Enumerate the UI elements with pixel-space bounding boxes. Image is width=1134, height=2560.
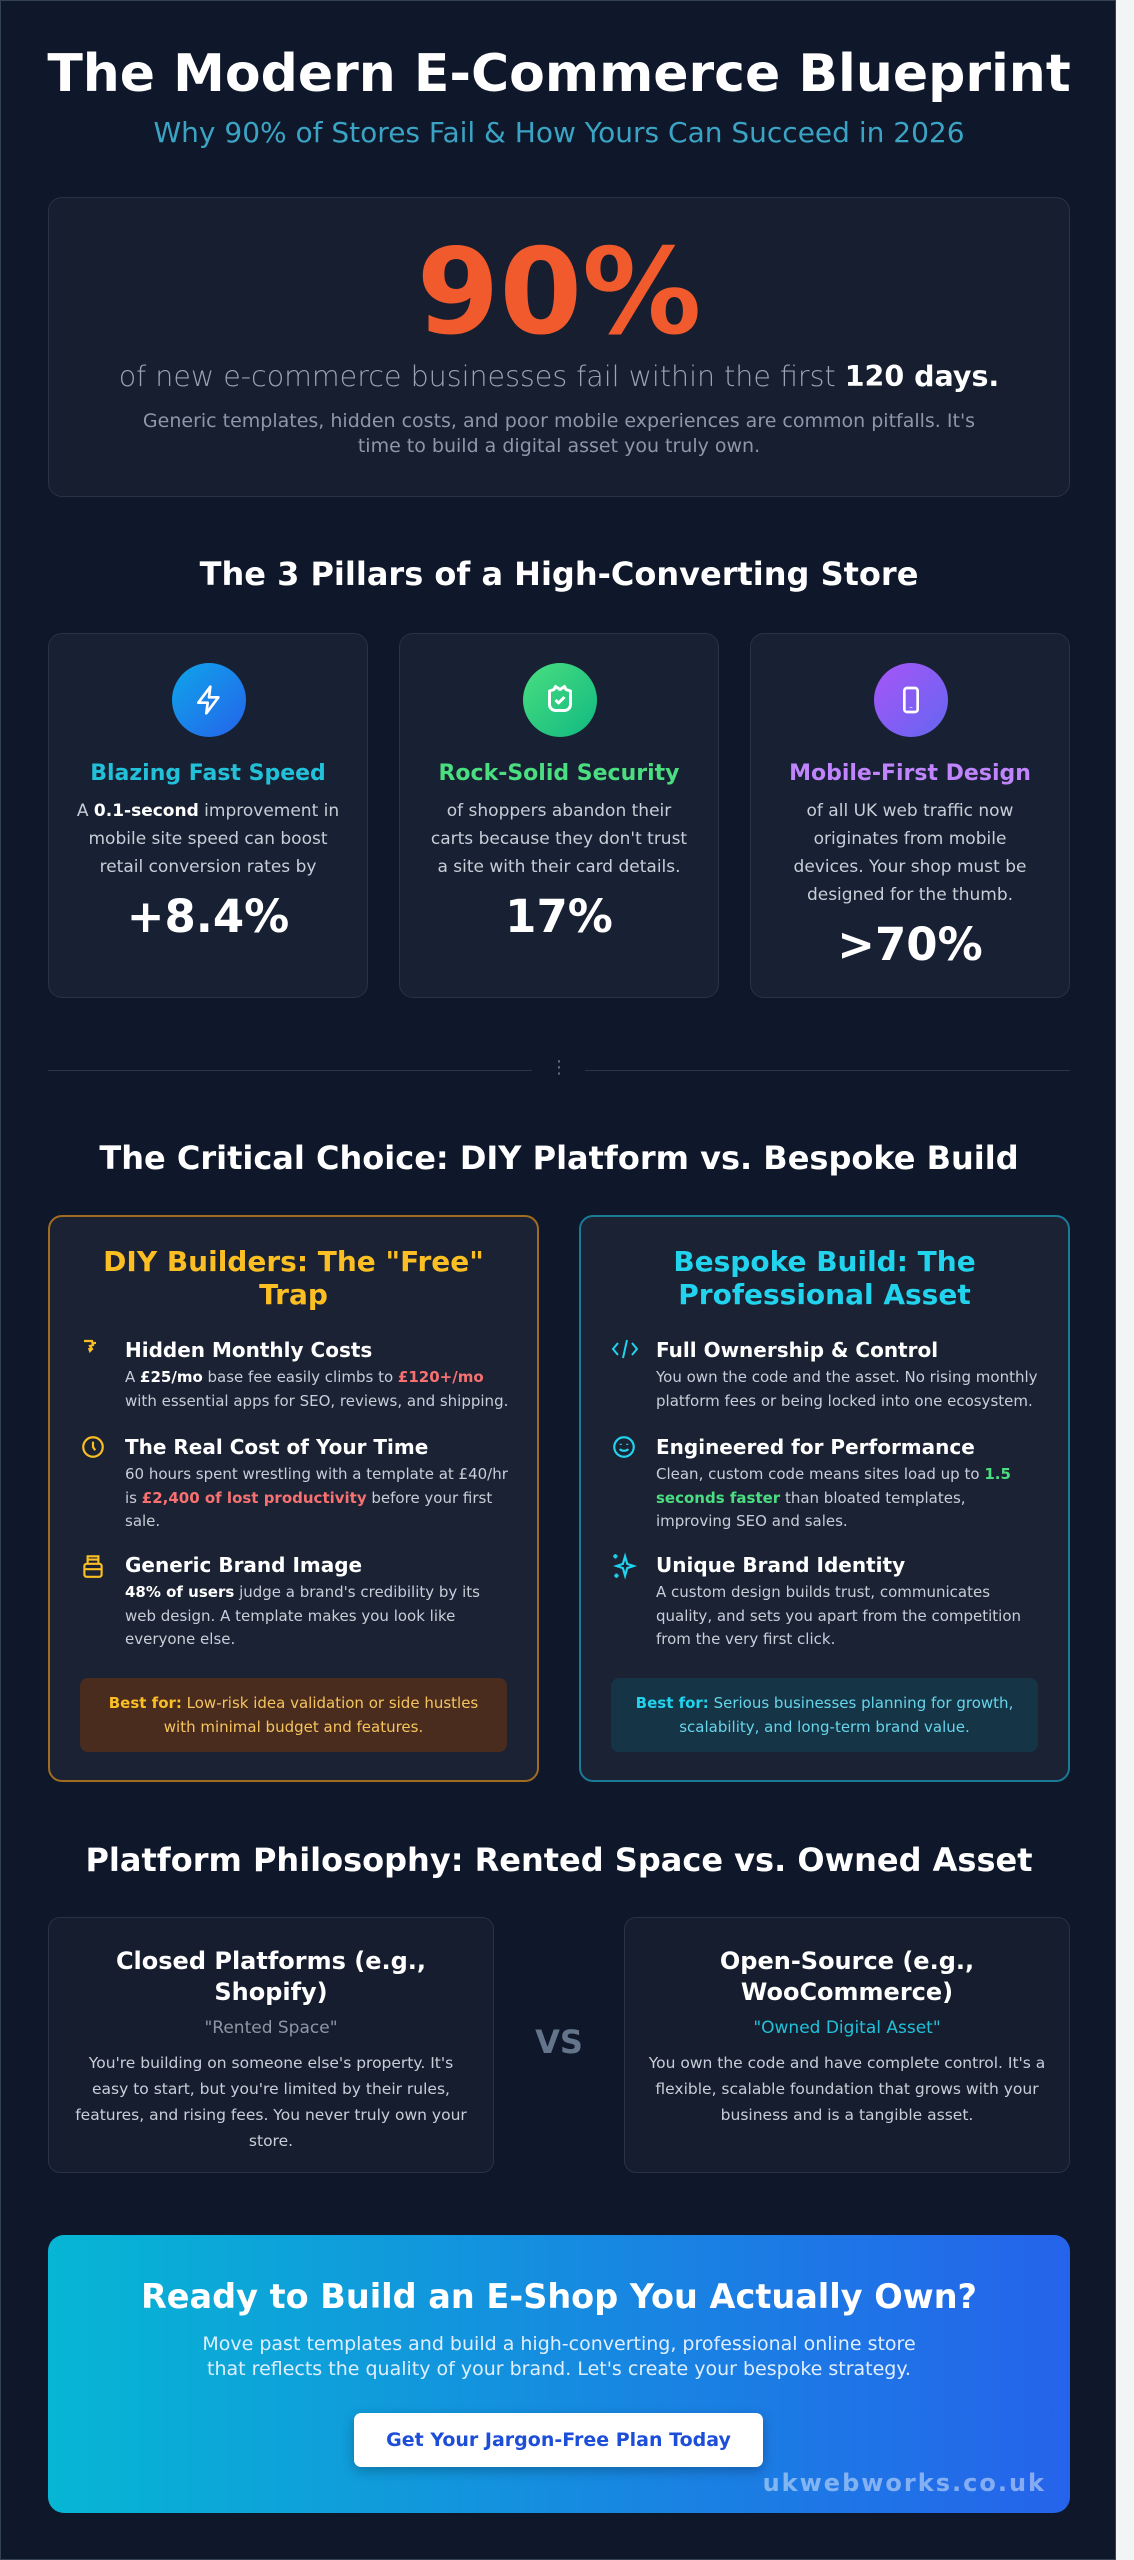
item: generic brand: Generic Brand Image — [125, 1553, 362, 1577]
item: ownership: You own the code and the asset. No rising monthly platform fees or being locked into one ecosystem. — [656, 1368, 1038, 1410]
title: The Modern E-Commerce Blueprint — [47, 44, 1071, 104]
item: ownership: Full Ownership & Control — [656, 1338, 938, 1362]
heading: platform philosophy: Platform Philosophy: Rented Space vs. Owned Asset — [85, 1841, 1033, 1879]
item: performance — [613, 1435, 1011, 1530]
panel: closed platforms: "Rented Space" — [204, 2018, 338, 2038]
card title: Bespoke Build: The Professional Asset — [673, 1245, 976, 1311]
item: ownership — [612, 1338, 1038, 1410]
panel: security — [399, 633, 719, 998]
button — [354, 2413, 763, 2467]
button: Get Your Jargon-Free Plan Today — [386, 2429, 731, 2451]
CTA text: Move past templates and build a high-converting, professional online store that reflects the quality of your brand. Let's create your bespoke strategy. — [202, 2333, 916, 2380]
heading: critical choice: The Critical Choice: DIY Platform vs. Bespoke Build — [99, 1139, 1019, 1177]
stat: +8.4% — [127, 890, 289, 943]
stat: >70% — [837, 918, 983, 971]
item: performance: Clean, custom code means sites load up to 1.5 seconds faster than bloated templates, improving SEO and sales. — [656, 1465, 1011, 1530]
item: hidden costs — [84, 1338, 508, 1410]
panel: open source — [624, 1917, 1070, 2173]
panel: closed platforms: Closed Platforms (e.g., Shopify) — [116, 1947, 426, 2006]
pillar text: of shoppers abandon their carts because they don't trust a site with their card details. — [431, 801, 687, 877]
item: time cost — [82, 1435, 508, 1530]
item: brand identity: Unique Brand Identity — [656, 1553, 905, 1577]
pillar title: Mobile-First Design — [789, 761, 1031, 786]
item: generic brand — [83, 1553, 480, 1648]
panel: closed platforms: You're building on someone else's property. It's easy to start, but you're limited by their rules, features, and rising fees. You never truly own your store. — [75, 2054, 467, 2150]
icon: shield — [523, 663, 597, 737]
item: brand identity: A custom design builds trust, communicates quality, and sets you apart from the competition from the very first click. — [656, 1583, 1021, 1648]
panel: hero stat — [48, 197, 1070, 497]
panel: bespoke build — [579, 1215, 1070, 1782]
big stat: 90% — [417, 224, 701, 362]
best for box: Best for: Low-risk idea validation or side hustles with minimal budget and features. — [109, 1694, 478, 1736]
item: brand identity — [613, 1552, 1021, 1648]
CTA heading: Ready to Build an E-Shop You Actually Own? — [141, 2277, 977, 2316]
pillar text: A 0.1-second improvement in mobile site speed can boost retail conversion rates by — [77, 801, 339, 877]
best for box — [611, 1678, 1038, 1752]
panel: open source: "Owned Digital Asset" — [753, 2018, 941, 2038]
panel: speed — [48, 633, 368, 998]
panel: mobile — [750, 633, 1070, 998]
panel: CTA — [48, 2235, 1070, 2513]
item: performance: Engineered for Performance — [656, 1435, 975, 1459]
pillar text: of all UK web traffic now originates from mobile devices. Your shop must be designed for the thumb. — [794, 801, 1026, 905]
panel: open source: Open-Source (e.g., WooCommerce) — [720, 1947, 974, 2006]
item: hidden costs: A £25/mo base fee easily climbs to £120+/mo with essential apps for SEO, reviews, and shipping. — [125, 1368, 508, 1410]
brand url: ukwebworks.co.uk — [763, 2469, 1046, 2497]
panel: closed platforms — [48, 1917, 494, 2173]
best for box — [80, 1678, 507, 1752]
stat caption: of new e-commerce businesses fail within the first 120 days. — [119, 360, 999, 393]
panel: DIY builders — [48, 1215, 539, 1782]
best for box: Best for: Serious businesses planning for growth, scalability, and long-term brand value. — [636, 1694, 1013, 1736]
item: time cost: The Real Cost of Your Time — [125, 1435, 428, 1459]
item: hidden costs: Hidden Monthly Costs — [125, 1338, 372, 1362]
text: ⋮ — [550, 1057, 568, 1078]
vs label: VS — [535, 2023, 583, 2061]
subtitle: Why 90% of Stores Fail & How Yours Can Succeed in 2026 — [153, 116, 965, 149]
card title: DIY Builders: The "Free" Trap — [103, 1245, 484, 1311]
panel: open source: You own the code and have complete control. It's a flexible, scalable foundation that grows with your business and is a tangible asset. — [649, 2054, 1045, 2124]
heading: pillars: The 3 Pillars of a High-Converting Store — [200, 555, 918, 593]
hero description: Generic templates, hidden costs, and poor mobile experiences are common pitfalls. It's time to build a digital asset you truly own. — [143, 410, 975, 457]
icon: lightning — [172, 663, 246, 737]
item: generic brand: 48% of users judge a brand's credibility by its web design. A template makes you look like everyone else. — [125, 1583, 480, 1648]
item: time cost: 60 hours spent wrestling with a template at £40/hr is £2,400 of lost productivity before your first sale. — [125, 1465, 508, 1530]
pillar title: Blazing Fast Speed — [90, 761, 326, 786]
pillar title: Rock-Solid Security — [438, 761, 680, 786]
stat: 17% — [505, 890, 613, 943]
icon: phone — [874, 663, 948, 737]
